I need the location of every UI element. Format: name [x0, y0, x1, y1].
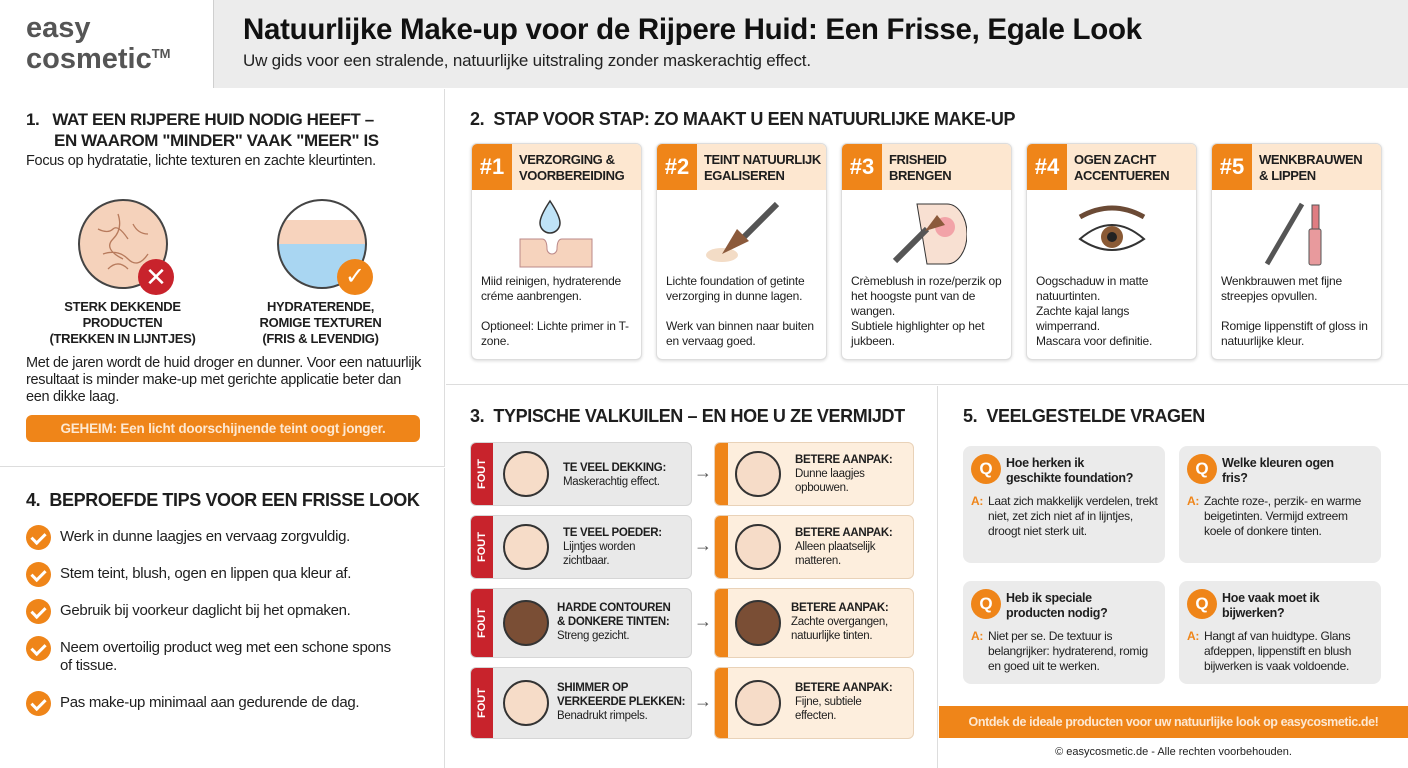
panel: section 4 tips: of tissue.: [60, 657, 117, 674]
header: [0, 0, 1408, 88]
text block: Met de jaren wordt de huid droger en dunner. Voor een natuurlijk resultaat is minder make-up met gerichte applicatie beter dan een dikke laag.: [26, 355, 421, 405]
label: good: HYDRATERENDE,: [267, 299, 374, 314]
pitfall 3: [470, 588, 914, 658]
faq 4: [1179, 581, 1381, 684]
callout: secret: [26, 415, 420, 442]
step 4: #4: [1035, 154, 1059, 179]
pitfall 1: Dunne laagjes: [795, 468, 865, 480]
faq 3: Q: [979, 594, 993, 613]
title block: [214, 0, 1408, 88]
icon: dry skin: ✕: [145, 262, 167, 292]
logo: cosmeticTM: [26, 43, 171, 75]
step 4: ACCENTUEREN: [1074, 168, 1169, 183]
faq 2: Q: [1195, 459, 1209, 478]
step 2: Lichte foundation of getinte verzorging in dunne lagen.: [666, 274, 805, 303]
pitfall 3: HARDE CONTOUREN: [557, 602, 670, 614]
step 5: [1211, 143, 1382, 360]
pitfall 3: Zachte overgangen,: [791, 616, 888, 628]
pitfall 4: VERKEERDE PLEKKEN:: [557, 696, 685, 708]
icon: dry skin: [78, 199, 168, 289]
step 1: VERZORGING &: [519, 152, 615, 167]
pitfall 1: →: [694, 462, 712, 482]
pitfall 4: BETERE AANPAK:: [795, 682, 892, 694]
pitfall 3: FOUT: [476, 608, 488, 638]
pitfall 1: FOUT: [476, 459, 488, 489]
panel: section 1: 1. WAT EEN RIJPERE HUID NODIG HEEFT –: [26, 110, 374, 129]
faq 2: Zachte roze-, perzik- en warme beigetinten. Vermijd extreem koele of donkere tinten.: [1204, 494, 1361, 538]
panel: section 4 tips: 4. BEPROEFDE TIPS VOOR EEN FRISSE LOOK: [26, 490, 419, 510]
step 1: Miid reinigen, hydraterende créme aanbrengen.: [481, 274, 621, 303]
pitfall 2: zichtbaar.: [563, 555, 609, 567]
step 3: FRISHEID: [889, 152, 946, 167]
pitfall 1: BETERE AANPAK:: [795, 454, 892, 466]
panel: section 3 pitfalls: [446, 386, 938, 768]
label: good: ROMIGE TEXTUREN: [260, 315, 381, 330]
faq 1: geschikte foundation?: [1006, 471, 1133, 485]
label: bad: PRODUCTEN: [83, 315, 162, 330]
step 1: #1: [480, 154, 504, 179]
pitfall 4: SHIMMER OP: [557, 682, 628, 694]
title block: Natuurlijke Make-up voor de Rijpere Huid: Een Frisse, Egale Look: [243, 13, 1142, 46]
faq 3: Heb ik speciale: [1006, 591, 1092, 605]
pitfall 4: Benadrukt rimpels.: [557, 710, 647, 722]
panel: section 4 tips: Werk in dunne laagjes en vervaag zorgvuldig.: [60, 528, 350, 545]
step 5: & LIPPEN: [1259, 168, 1316, 183]
pitfall 3: Streng gezicht.: [557, 630, 629, 642]
panel: section 5 FAQ: 5. VEELGESTELDE VRAGEN: [963, 406, 1205, 426]
step 3: Crèmeblush in roze/perzik op het hoogste punt van de wangen.: [851, 274, 1001, 318]
pitfall 2: matteren.: [795, 555, 841, 567]
step 5: Wenkbrauwen met fijne streepjes opvullen.: [1221, 274, 1342, 303]
faq 1: A:: [971, 494, 983, 508]
faq 2: Welke kleuren ogen: [1222, 456, 1334, 470]
panel: section 1: [0, 89, 445, 467]
step 2: [656, 143, 827, 360]
label: good: [260, 299, 381, 346]
step 4: Zachte kajal langs wimperrand.: [1036, 304, 1129, 333]
pitfall 1: [470, 442, 914, 506]
pitfall 3: →: [694, 611, 712, 631]
pitfall 3: & DONKERE TINTEN:: [557, 616, 669, 628]
faq 4: Hoe vaak moet ik: [1222, 591, 1319, 605]
pitfall 4: →: [694, 691, 712, 711]
faq 3: Niet per se. De textuur is belangrijker: hydraterend, romig en goed uit te werken.: [988, 629, 1148, 673]
faq 4: A:: [1187, 629, 1199, 643]
panel: section 4 tips: Pas make-up minimaal aan gedurende de dag.: [60, 694, 359, 711]
label: bad: [49, 299, 196, 346]
faq 2: A:: [1187, 494, 1199, 508]
panel: section 2 steps: [446, 89, 1408, 385]
faq 4: bijwerken?: [1222, 606, 1284, 620]
step 1: Optioneel: Lichte primer in T-zone.: [481, 319, 629, 348]
faq 3: [963, 581, 1165, 684]
label: bad: (TREKKEN IN LIJNTJES): [49, 331, 196, 346]
panel: section 4 tips: Stem teint, blush, ogen en lippen qua kleur af.: [60, 565, 351, 582]
faq 4: Q: [1195, 594, 1209, 613]
pitfall 4: effecten.: [795, 710, 836, 722]
step 5: WENKBRAUWEN: [1259, 152, 1362, 167]
logo: [0, 0, 214, 88]
faq 1: Hoe herken ik: [1006, 456, 1084, 470]
step 1: VOORBEREIDING: [519, 168, 624, 183]
faq 1: [963, 446, 1165, 563]
banner: [939, 706, 1408, 738]
pitfall 2: Lijntjes worden: [563, 541, 635, 553]
label: bad: STERK DEKKENDE: [64, 299, 181, 314]
pitfall 2: FOUT: [476, 532, 488, 562]
step 3: Subtiele highlighter op het jukbeen.: [851, 319, 984, 348]
pitfall 1: opbouwen.: [795, 482, 849, 494]
faq 3: A:: [971, 629, 983, 643]
pitfall 1: Maskerachtig effect.: [563, 476, 660, 488]
faq 1: Laat zich makkelijk verdelen, trekt niet, zet zich niet af in lijntjes, droogt niet sterk uit.: [988, 494, 1158, 538]
callout: secret: GEHEIM: Een licht doorschijnende teint oogt jonger.: [60, 421, 386, 436]
step 2: TEINT NATUURLIJK: [704, 152, 821, 167]
logo: easy: [26, 12, 91, 44]
step 4: OGEN ZACHT: [1074, 152, 1156, 167]
pitfall 4: Fijne, subtiele: [795, 696, 861, 708]
panel: section 2 steps: 2. STAP VOOR STAP: ZO MAAKT U EEN NATUURLIJKE MAKE-UP: [470, 109, 1015, 129]
panel: section 4 tips: Gebruik bij voorkeur daglicht bij het opmaken.: [60, 602, 351, 619]
pitfall 2: TE VEEL POEDER:: [563, 527, 662, 539]
banner: Ontdek de ideale producten voor uw natuurlijke look op easycosmetic.de!: [969, 715, 1378, 729]
step 2: #2: [665, 154, 689, 179]
pitfall 2: Alleen plaatselijk: [795, 541, 875, 553]
faq 3: producten nodig?: [1006, 606, 1107, 620]
step 2: Werk van binnen naar buiten en vervaag goed.: [666, 319, 814, 348]
pitfall 4: [470, 667, 914, 739]
step 4: Mascara voor definitie.: [1036, 334, 1152, 348]
panel: section 3 pitfalls: 3. TYPISCHE VALKUILEN – EN HOE U ZE VERMIJDT: [470, 406, 905, 426]
step 1: [471, 143, 642, 360]
icon: hydrated skin: [277, 199, 367, 289]
pitfall 1: TE VEEL DEKKING:: [563, 462, 666, 474]
step 3: [841, 143, 1012, 360]
pitfall 2: BETERE AANPAK:: [795, 527, 892, 539]
panel: section 4 tips: Neem overtoilig product weg met een schone spons: [60, 639, 391, 656]
pitfall 3: BETERE AANPAK:: [791, 602, 888, 614]
panel: section 1: EN WAAROM "MINDER" VAAK "MEER" IS: [54, 131, 379, 150]
icon: hydrated skin: ✓: [345, 263, 365, 290]
pitfall 2: →: [694, 535, 712, 555]
step 5: #5: [1220, 154, 1244, 179]
copyright: © easycosmetic.de - Alle rechten voorbehouden.: [1055, 746, 1292, 758]
faq 4: Hangt af van huidtype. Glans afdeppen, lippenstift en blush bijwerken is vaak voldoende.: [1204, 629, 1351, 673]
step 3: BRENGEN: [889, 168, 951, 183]
step 2: EGALISEREN: [704, 168, 785, 183]
faq 1: Q: [979, 459, 993, 478]
pitfall 4: FOUT: [476, 688, 488, 718]
step 3: #3: [850, 154, 874, 179]
faq 2: [1179, 446, 1381, 563]
panel: section 1: Focus op hydratatie, lichte texturen en zachte kleurtinten.: [26, 153, 376, 169]
step 4: Oogschaduw in matte natuurtinten.: [1036, 274, 1148, 303]
pitfall 2: [470, 515, 914, 579]
title block: Uw gids voor een stralende, natuurlijke uitstraling zonder maskerachtig effect.: [243, 51, 811, 70]
pitfall 3: natuurlijke tinten.: [791, 630, 872, 642]
step 5: Romige lippenstift of gloss in natuurlijke kleur.: [1221, 319, 1368, 348]
panel: section 5 FAQ: [939, 406, 1408, 758]
panel: section 4 tips: [0, 468, 445, 768]
step 4: [1026, 143, 1197, 360]
label: good: (FRIS & LEVENDIG): [262, 331, 379, 346]
faq 2: fris?: [1222, 471, 1248, 485]
